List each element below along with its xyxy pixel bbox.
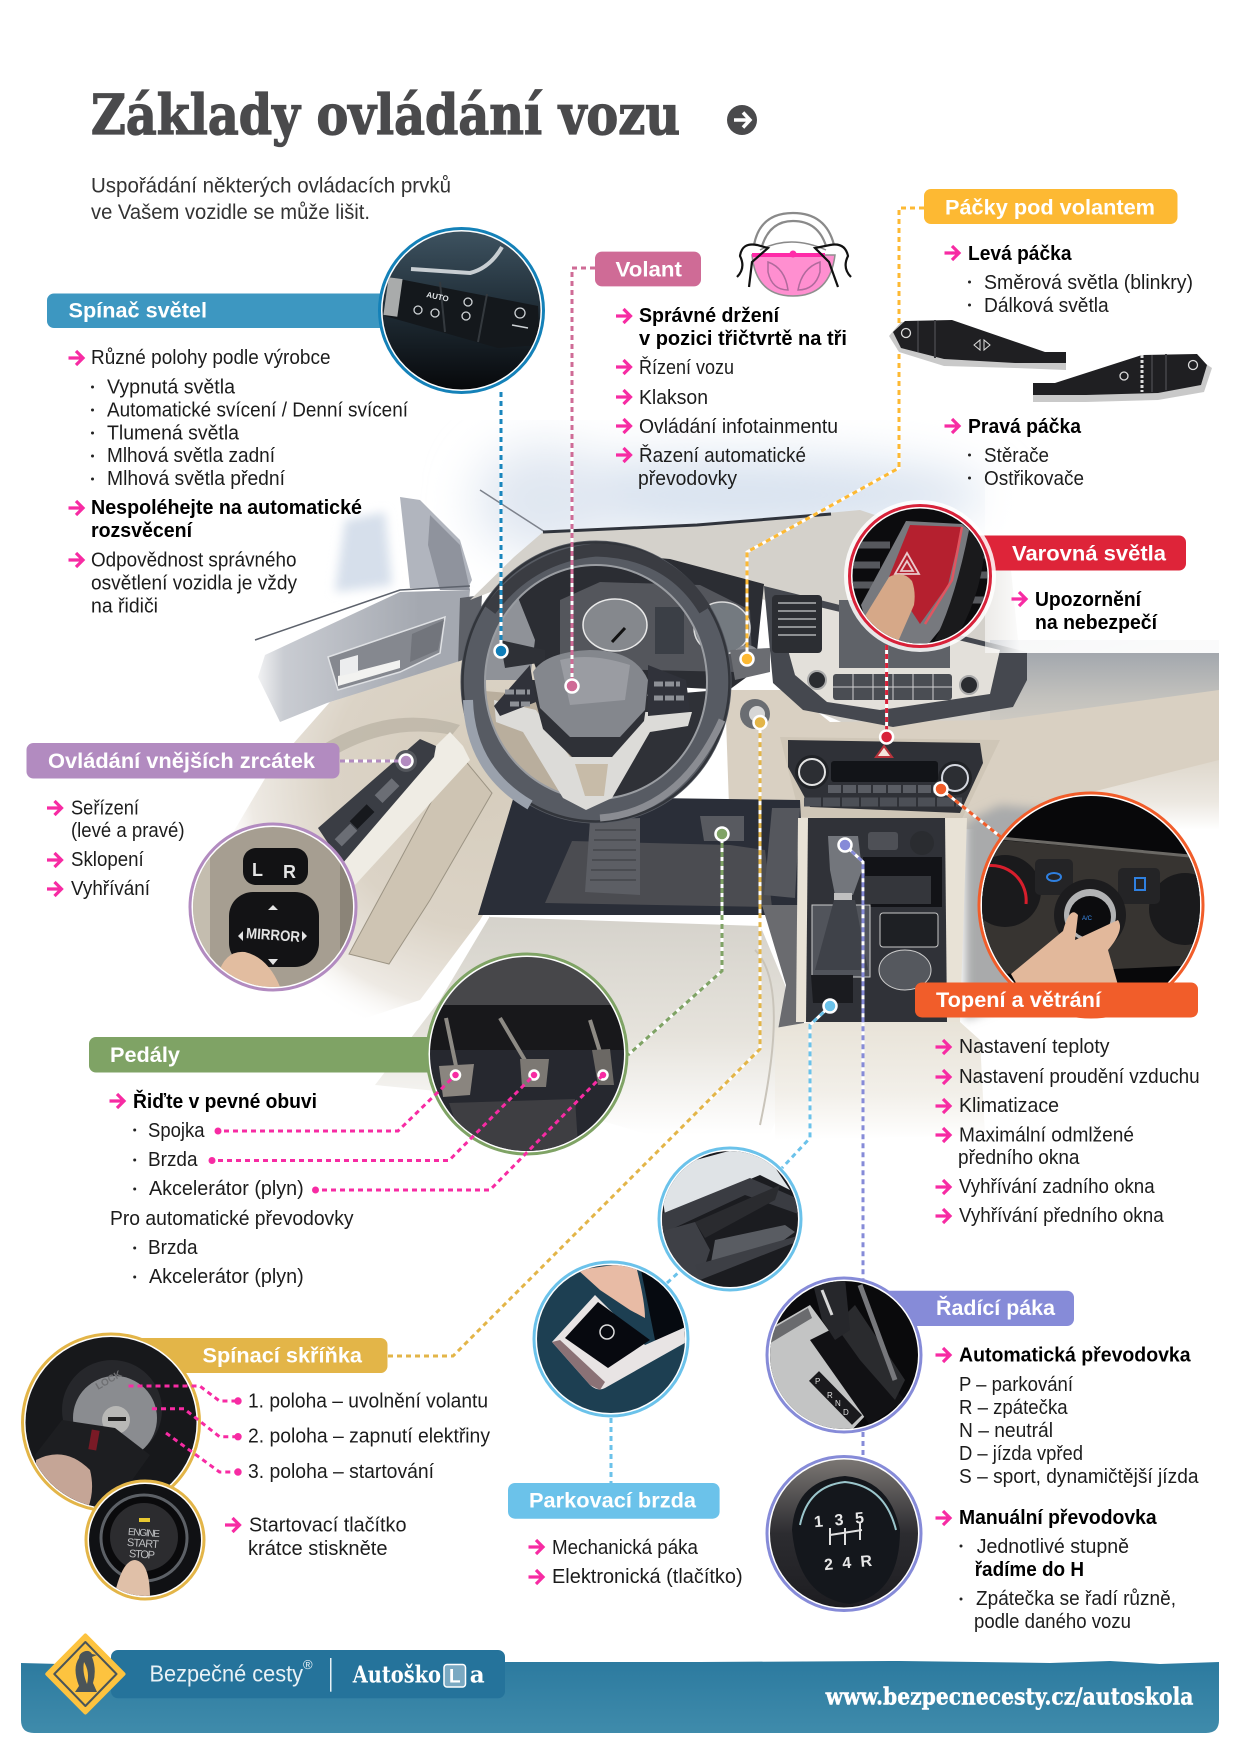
white haze behind the warning lights text <box>985 570 1219 653</box>
list: 3. poloha – startování <box>248 1461 434 1483</box>
list: Maximální odmlžené <box>959 1124 1134 1146</box>
pedal leader lines <box>208 1075 603 1194</box>
list: Mlhová světla přední <box>107 468 285 490</box>
list: Sklopení <box>71 849 144 871</box>
subtitle <box>91 174 451 224</box>
list: Automatické svícení / Denní svícení <box>107 400 408 422</box>
list: Klakson <box>639 387 708 409</box>
list: krátce stiskněte <box>248 1538 388 1560</box>
list <box>225 1391 490 1560</box>
left lever list: Levá páčka <box>968 243 1072 265</box>
list: podle daného vozu <box>974 1611 1131 1633</box>
right lever list: Ostřikovače <box>984 468 1084 490</box>
list: Nastavení proudění vzduchu <box>959 1066 1200 1088</box>
panel: Volant <box>595 213 851 490</box>
photo: automatic shifter <box>767 1278 921 1432</box>
heading bar <box>924 189 1178 224</box>
list: Správné držení <box>639 305 780 327</box>
list: Vyhřívání zadního okna <box>959 1176 1155 1198</box>
heading bar: Ovládání vnějších zrcátek <box>48 750 315 773</box>
list: Automatická převodovka <box>959 1345 1191 1367</box>
photo: mirror switch <box>190 824 356 995</box>
photo: climate knob <box>969 793 1221 1017</box>
list: Jednotlivé stupně <box>977 1536 1129 1558</box>
photo: start button: START <box>127 1537 160 1551</box>
panel: Parkovací brzda <box>508 1148 801 1588</box>
website url: www.bezpecnecesty.cz/autoskola <box>825 1684 1193 1711</box>
dash beige lower <box>725 690 1219 835</box>
list: 1. poloha – uvolnění volantu <box>248 1391 488 1413</box>
heading bar: Volant <box>616 258 682 282</box>
center tunnel <box>796 818 967 1022</box>
door upper grey trim <box>258 590 482 722</box>
list: 2. poloha – zapnutí elektřiny <box>248 1426 490 1448</box>
list <box>68 347 408 618</box>
list: Klimatizace <box>959 1095 1059 1117</box>
list: Akcelerátor (plyn) <box>149 1266 304 1288</box>
logo: penguin road sign <box>47 1636 123 1712</box>
footer brand bar: L <box>449 1666 461 1688</box>
footwell <box>478 796 805 915</box>
heading bar <box>89 1037 439 1072</box>
photo: climate knob: A/C <box>1082 916 1093 922</box>
heading bar: Pedály <box>110 1044 180 1067</box>
passenger side wall <box>965 805 1050 1020</box>
photo: start button <box>86 1481 204 1599</box>
text: na nebezpečí <box>1035 612 1158 634</box>
list: řadíme do H <box>975 1559 1084 1581</box>
heading bar <box>508 1483 720 1519</box>
list <box>616 305 847 490</box>
panel: Topení a větrání <box>915 793 1221 1227</box>
list: Ovládání infotainmentu <box>639 416 838 438</box>
list: Startovací tlačítko <box>249 1515 406 1537</box>
list: Mechanická páka <box>552 1537 699 1559</box>
heading bar <box>860 1291 1074 1326</box>
footer band <box>21 1661 1219 1733</box>
panel: Páčky pod volantem <box>889 189 1212 490</box>
list: předního okna <box>958 1147 1080 1169</box>
photo: pedals <box>425 950 630 1165</box>
front seat <box>375 916 788 1135</box>
list: D – jízda vpřed <box>959 1443 1083 1465</box>
icon: title arrow <box>727 105 757 135</box>
windshield haze <box>475 445 990 555</box>
photo: manual gear knob: 1 3 5 <box>813 1510 865 1531</box>
steering wheel <box>462 542 770 822</box>
list: Vyhřívání předního okna <box>959 1205 1165 1227</box>
subtitle: ve Vašem vozidle se může lišit. <box>91 201 370 224</box>
door lower panel beige <box>237 660 536 1010</box>
list: P – parkování <box>959 1374 1073 1396</box>
list: Mlhová světla zadní <box>107 445 275 467</box>
position leader lines <box>128 1386 242 1476</box>
list: Pro automatické převodovky <box>110 1208 354 1230</box>
right lever list: Stěrače <box>984 445 1049 467</box>
list: Vypnutá světla <box>107 376 236 398</box>
heading bar: Spínací skříňka <box>202 1345 362 1368</box>
photo: ignition lock <box>22 1334 200 1512</box>
photo: automatic shifter: D <box>843 1408 849 1417</box>
list: Tlumená světla <box>107 422 240 444</box>
list: Různé polohy podle výrobce <box>91 347 330 369</box>
heading bar <box>26 743 340 778</box>
list: Řízení vozu <box>639 356 734 379</box>
list: osvětlení vozidla je vždy <box>91 573 297 595</box>
right side dash gradient <box>990 640 1219 830</box>
list: převodovky <box>638 468 737 490</box>
side window and mirror <box>255 490 545 640</box>
list: rozsvěcení <box>91 520 193 542</box>
heading bar <box>130 1338 388 1373</box>
photo: electronic parking button <box>534 1262 690 1416</box>
list: Řiďte v pevné obuvi <box>133 1089 317 1113</box>
list: Akcelerátor (plyn) <box>149 1178 304 1200</box>
heading bar: Parkovací brzda <box>529 1490 696 1513</box>
heading bar <box>595 252 701 286</box>
photo: start button: STOP <box>129 1548 155 1562</box>
right lever list: Pravá páčka <box>968 416 1082 438</box>
dashboard top surface <box>470 510 1020 730</box>
footer brand bar: ® <box>303 1657 313 1672</box>
photo: light stalk <box>380 228 545 393</box>
panel: Spínač světel <box>47 228 545 618</box>
footer brand bar: Autoško <box>352 1662 441 1689</box>
connector dots <box>400 644 948 1012</box>
title: Základy ovládání vozu <box>91 82 680 147</box>
armrest <box>776 1022 984 1122</box>
footer brand bar <box>111 1650 505 1698</box>
list <box>110 1089 354 1288</box>
panel: Ovládání vnějších zrcátek <box>26 743 356 995</box>
photo: ignition lock: LOCK <box>94 1369 125 1393</box>
panel: Pedály <box>89 950 630 1288</box>
start button on dash <box>740 699 770 729</box>
photo: automatic shifter: N <box>835 1399 841 1408</box>
list: v pozici třičtvrtě na tři <box>639 328 847 350</box>
left lever list: Směrová světla (blinkry) <box>984 272 1193 294</box>
heading bar <box>47 294 407 328</box>
heading bar: Topení a větrání <box>936 989 1102 1012</box>
photo: manual gear knob: 2 4 R <box>823 1553 873 1574</box>
illustration: car interior watercolor <box>205 445 1219 1140</box>
photo: start button: ENGINE <box>128 1527 161 1540</box>
photo: hazard button <box>844 500 996 652</box>
heading bar: Řadící páka <box>936 1296 1055 1320</box>
list <box>936 1345 1199 1633</box>
list: Řazení automatické <box>639 444 806 467</box>
heading bar: Páčky pod volantem <box>945 196 1155 220</box>
panel: Řadící páka <box>767 1278 1199 1633</box>
panel: Spínací skříňka <box>22 1334 490 1599</box>
list: R – zpátečka <box>959 1397 1068 1419</box>
photo: left lever <box>889 320 1066 370</box>
list: Spojka <box>148 1120 205 1142</box>
list <box>47 798 184 900</box>
list: Brzda <box>148 1149 198 1171</box>
photo: automatic shifter: R <box>827 1391 833 1400</box>
panel: Varovná světla <box>844 500 1186 652</box>
photo: manual gear knob <box>767 1456 921 1612</box>
text <box>1012 589 1158 634</box>
list: Seřízení <box>71 798 139 820</box>
list: Odpovědnost správného <box>91 550 296 572</box>
heading bar: Spínač světel <box>68 300 207 322</box>
list: Vyhřívání <box>71 878 150 900</box>
list: (levé a pravé) <box>71 820 184 842</box>
footer brand bar: a <box>470 1662 485 1689</box>
photo: hand brake lever <box>659 1148 801 1290</box>
photo: automatic shifter: P <box>815 1377 820 1386</box>
photo: mirror switch: L <box>252 860 263 880</box>
footwell wall beside seat <box>762 905 804 1030</box>
left lever list <box>944 243 1193 317</box>
heading bar: Varovná světla <box>1012 542 1166 566</box>
climate panel <box>780 737 1000 823</box>
photo: right lever <box>1033 354 1212 402</box>
right lever list <box>944 416 1084 490</box>
list: S – sport, dynamičtější jízda <box>959 1466 1199 1488</box>
photo: mirror switch: R <box>283 862 296 882</box>
footer brand bar: Bezpečné cesty <box>150 1661 303 1687</box>
heading bar <box>915 982 1198 1018</box>
text: Upozornění <box>1035 589 1142 611</box>
list: Nastavení teploty <box>959 1036 1110 1058</box>
list: Zpátečka se řadí různě, <box>976 1588 1176 1610</box>
list: Manuální převodovka <box>959 1507 1157 1529</box>
icon: hands on steering wheel <box>737 213 851 296</box>
photo: mirror switch: MIRROR <box>246 925 301 946</box>
center console bezel <box>764 586 1027 727</box>
list: N – neutrál <box>959 1420 1053 1442</box>
window switch panel <box>318 739 436 864</box>
subtitle: Uspořádání některých ovládacích prvků <box>91 174 451 198</box>
list: Elektronická (tlačítko) <box>552 1566 743 1588</box>
list <box>936 1036 1200 1227</box>
left lever list: Dálková světla <box>984 295 1110 317</box>
photo: light stalk: AUTO <box>426 290 449 304</box>
list: Nespoléhejte na automatické <box>91 497 362 519</box>
connector lines <box>340 208 1002 1483</box>
heading bar <box>960 536 1186 570</box>
list <box>528 1537 743 1588</box>
list: na řidiči <box>91 596 158 618</box>
instrument cluster <box>510 554 764 690</box>
list: Brzda <box>148 1237 198 1259</box>
